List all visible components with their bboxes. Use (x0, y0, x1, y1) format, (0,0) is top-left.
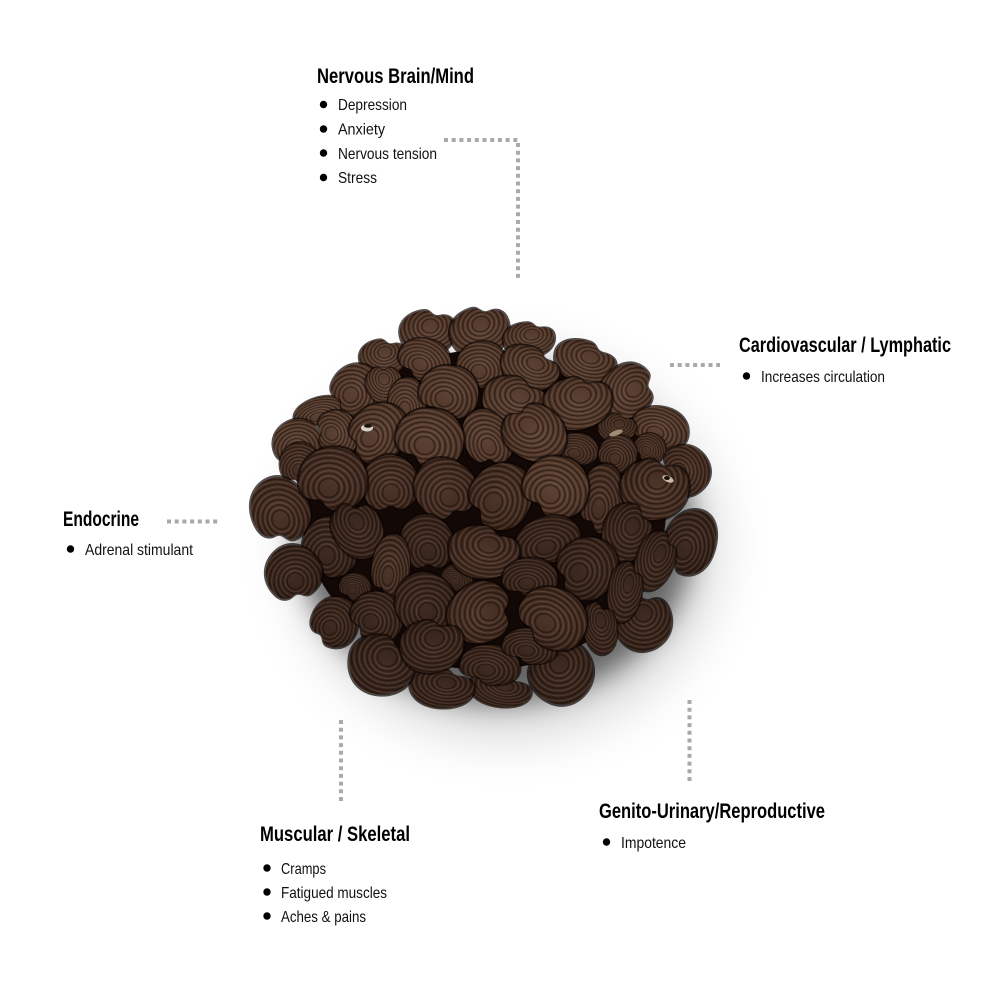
heading: nervous: Nervous Brain/Mind (317, 65, 474, 88)
list: cardiovascular: Increases circulation (761, 369, 885, 386)
connector: cardiovascular (670, 363, 720, 367)
list: nervous (320, 97, 437, 187)
heading: endocrine: Endocrine (63, 508, 139, 531)
list: nervous: Anxiety (338, 122, 385, 138)
panel: Muscular / Skeletal (260, 823, 410, 926)
list: nervous: Nervous tension (338, 146, 437, 163)
list: nervous: Stress (338, 170, 377, 187)
seed pile photo (229, 281, 729, 721)
connector: endocrine (167, 520, 220, 524)
connector: genito-urinary (688, 700, 692, 782)
connector: muscular (339, 720, 343, 803)
list: genito-urinary: Impotence (621, 835, 686, 852)
list: muscular: Cramps (281, 861, 326, 878)
panel: Endocrine (63, 508, 193, 559)
pile shadow (297, 360, 710, 730)
heading: muscular: Muscular / Skeletal (260, 823, 410, 846)
connector: nervous (444, 140, 518, 279)
list: muscular: Aches & pains (281, 909, 366, 926)
panel: Genito-Urinary/Reproductive (599, 800, 825, 852)
list: endocrine: Adrenal stimulant (85, 542, 193, 559)
heading: genito-urinary: Genito-Urinary/Reproductive (599, 800, 825, 823)
panel: Nervous Brain/Mind (317, 65, 474, 187)
list: muscular: Fatigued muscles (281, 885, 387, 902)
panel: Cardiovascular / Lymphatic (739, 334, 951, 386)
list: nervous: Depression (338, 97, 407, 114)
list: muscular (263, 861, 387, 926)
